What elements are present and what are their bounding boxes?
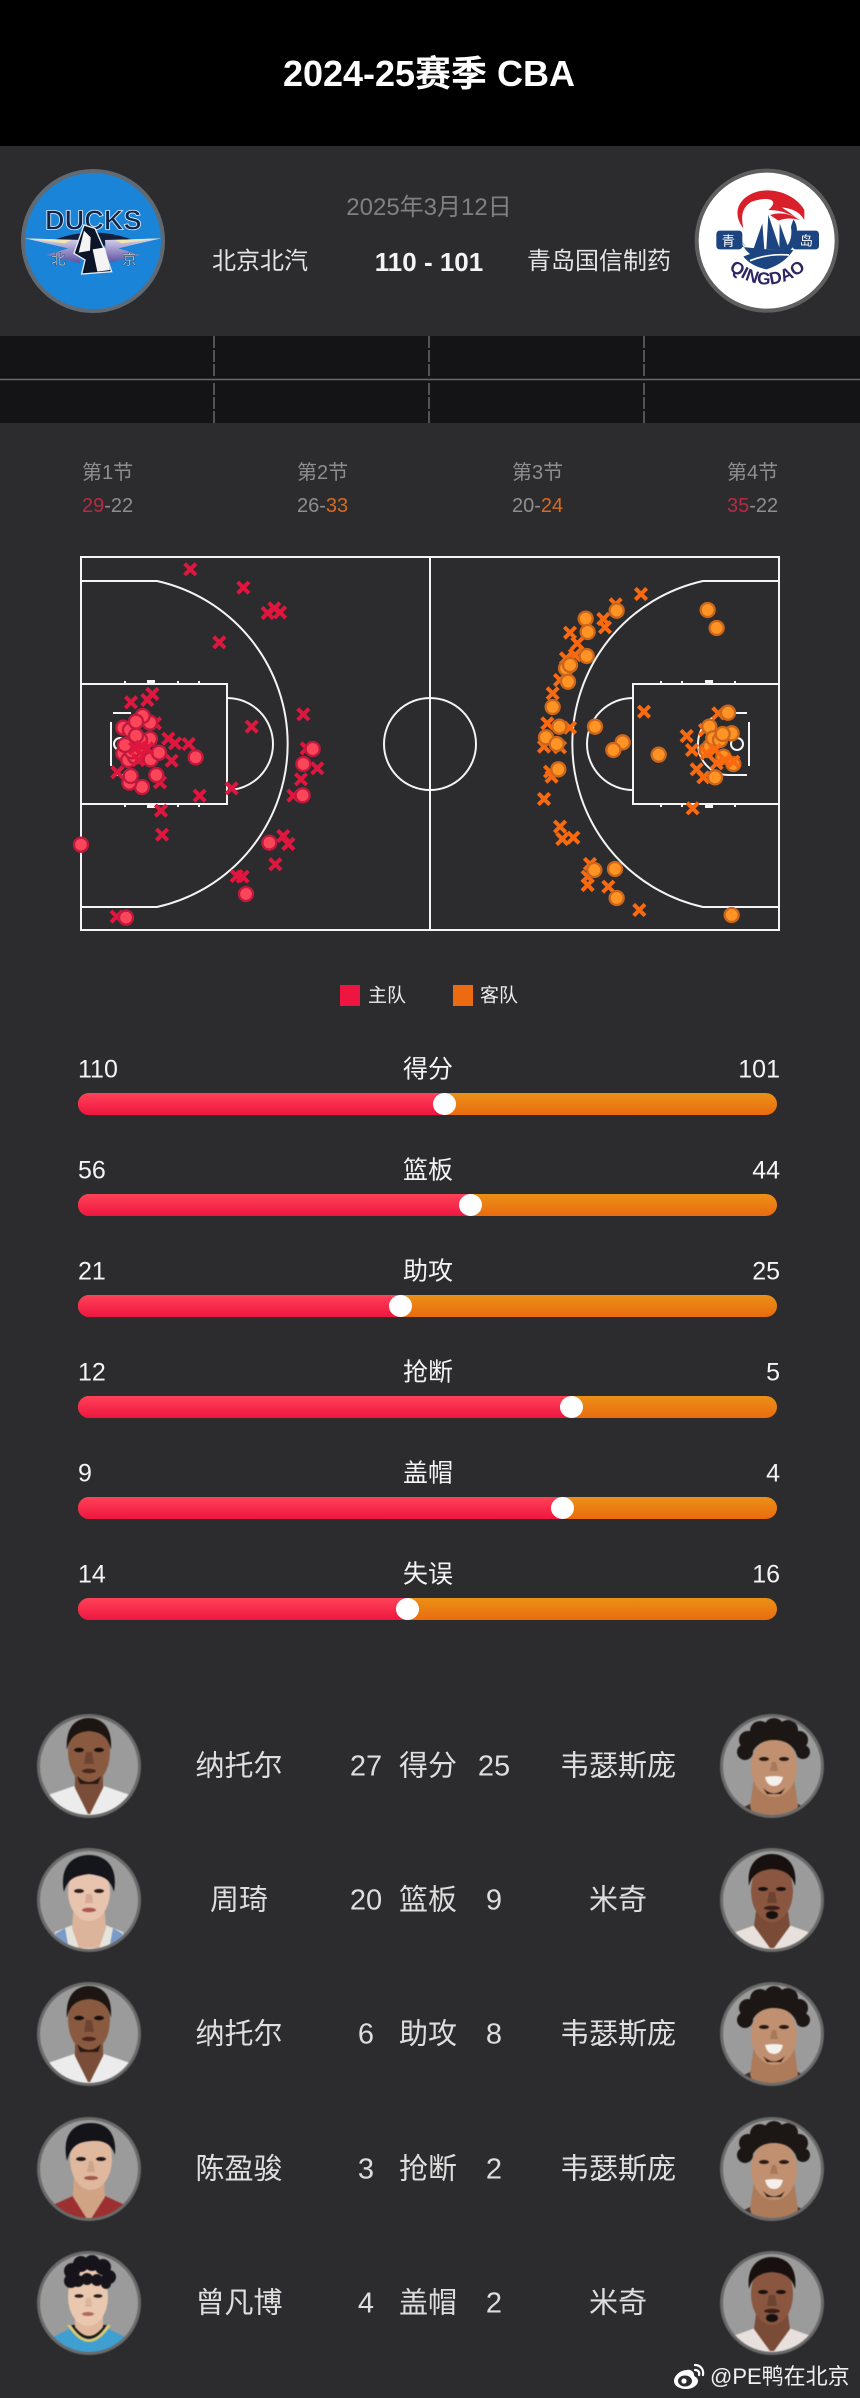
stat bar: points: 101: [738, 1055, 780, 1083]
icon: Beijing Ducks logo: DUCKS: [45, 204, 142, 235]
legend: away: 客队: [480, 986, 518, 1006]
icon: Qingdao logo: [694, 168, 839, 313]
icon: Qingdao logo: 岛: [800, 230, 813, 249]
avatar: Mickey: [720, 2250, 824, 2356]
player row: rebounds leaders: 篮板: [399, 1884, 457, 1916]
stat bar: steals: [78, 1358, 780, 1418]
stat bar: turnovers: 失误: [403, 1560, 453, 1588]
player row: points leaders: [36, 1714, 824, 1818]
shot chart: [72, 556, 780, 931]
player row: blocks leaders: 2: [486, 2288, 502, 2320]
player row: rebounds leaders: 米奇: [589, 1884, 647, 1916]
title: 2024-25赛季 CBA: [283, 52, 575, 94]
avatar: Zhou Qi: [36, 1848, 142, 1952]
stat bar: blocks: 盖帽: [403, 1459, 453, 1487]
player row: blocks leaders: [36, 2250, 824, 2356]
panel: match header: [0, 146, 860, 336]
quarter 4: 35-22: [727, 495, 778, 517]
avatar: Zeng Fanbo: [36, 2250, 142, 2356]
player row: points leaders: 韦瑟斯庞: [560, 1750, 676, 1782]
player row: blocks leaders: 曾凡博: [195, 2288, 283, 2320]
final score: 110 - 101: [375, 247, 483, 277]
avatar: Mickey: [720, 1848, 824, 1952]
stat bar: rebounds: 篮板: [403, 1156, 453, 1184]
stat bar: assists: 25: [752, 1257, 780, 1285]
player row: blocks leaders: 米奇: [589, 2288, 647, 2320]
quarter 2: 第2节: [297, 462, 348, 484]
stat bar: assists: 助攻: [403, 1257, 453, 1285]
player row: assists leaders: [36, 1982, 824, 2086]
stat bar: rebounds: 56: [78, 1156, 106, 1184]
stat bar: points: 得分: [403, 1055, 453, 1083]
player row: steals leaders: 韦瑟斯庞: [560, 2154, 676, 2186]
icon: Beijing Ducks logo: [21, 169, 165, 313]
stat bar: assists: 21: [78, 1257, 106, 1285]
legend: [340, 985, 518, 1006]
away team shots: [538, 588, 740, 922]
icon: Qingdao logo: QINGDAO: [731, 262, 804, 284]
stat bar: steals: 抢断: [403, 1358, 453, 1386]
stat bar: assists: [78, 1257, 780, 1317]
player row: points leaders: 27: [350, 1750, 382, 1782]
quarter 2: [297, 462, 348, 517]
player row: steals leaders: 3: [358, 2154, 374, 2186]
player row: assists leaders: 8: [486, 2018, 502, 2050]
timeline strip: [0, 336, 860, 423]
quarter 4: [727, 462, 778, 517]
stat bar: blocks: 9: [78, 1459, 92, 1487]
stat bar: steals: 5: [766, 1358, 780, 1386]
player row: blocks leaders: 4: [358, 2288, 374, 2320]
player row: rebounds leaders: 9: [486, 1884, 502, 1916]
court lines: [81, 557, 779, 930]
icon: Beijing Ducks logo: 北: [51, 248, 66, 269]
player row: points leaders: 25: [478, 1750, 510, 1782]
stat bar: points: 110: [78, 1055, 118, 1083]
stat bar: steals: 12: [78, 1358, 106, 1386]
quarter 3: 20-24: [512, 495, 563, 517]
player row: rebounds leaders: [36, 1848, 824, 1952]
stat bar: turnovers: 16: [752, 1560, 780, 1588]
stat bar: blocks: 4: [766, 1459, 780, 1487]
avatar: Chen Yingjun: [36, 2116, 142, 2222]
legend: away: [453, 985, 518, 1006]
stat bar: turnovers: [78, 1560, 780, 1620]
quarter 2: 26-33: [297, 495, 348, 517]
icon: Beijing Ducks logo: 京: [122, 248, 137, 269]
player row: steals leaders: 抢断: [399, 2154, 457, 2186]
player row: blocks leaders: 盖帽: [399, 2288, 457, 2320]
player row: steals leaders: 2: [486, 2154, 502, 2186]
stat bar: points: [78, 1055, 780, 1115]
icon: weibo: [674, 2364, 704, 2389]
player row: rebounds leaders: 20: [350, 1884, 382, 1916]
legend: home: [340, 985, 406, 1006]
quarter 3: [512, 462, 563, 517]
home team shots: [74, 564, 323, 925]
avatar: Nattle: [36, 1714, 142, 1818]
date: 2025年3月12日: [346, 194, 512, 221]
stat bar: blocks: [78, 1459, 780, 1519]
player row: points leaders: 得分: [399, 1750, 457, 1782]
avatar: Weatherspoon: [720, 1714, 824, 1818]
stat bar: rebounds: 44: [752, 1156, 780, 1184]
away team name: 青岛国信制药: [527, 248, 671, 275]
avatar: Weatherspoon: [720, 2116, 824, 2222]
stat bar: rebounds: [78, 1156, 780, 1216]
avatar: Nattle: [36, 1982, 142, 2086]
quarter 4: 第4节: [727, 462, 778, 484]
player row: steals leaders: 陈盈骏: [195, 2154, 283, 2186]
home team name: 北京北汽: [212, 248, 308, 275]
player row: assists leaders: 韦瑟斯庞: [560, 2018, 676, 2050]
quarter 1: 29-22: [82, 495, 133, 517]
quarter scores: [82, 462, 778, 517]
player row: assists leaders: 6: [358, 2018, 374, 2050]
player row: rebounds leaders: 周琦: [210, 1884, 268, 1916]
title bar: [0, 0, 860, 146]
avatar: Weatherspoon: [720, 1982, 824, 2086]
legend: home: 主队: [368, 986, 406, 1006]
player row: steals leaders: [36, 2116, 824, 2222]
stat bar: turnovers: 14: [78, 1560, 106, 1588]
player row: assists leaders: 纳托尔: [195, 2018, 283, 2050]
watermark text: @PE鸭在北京: [710, 2364, 850, 2389]
quarter 1: 第1节: [82, 462, 133, 484]
quarter 1: [82, 462, 133, 517]
quarter 3: 第3节: [512, 462, 563, 484]
player row: assists leaders: 助攻: [399, 2018, 457, 2050]
watermark: [674, 2364, 850, 2389]
player row: points leaders: 纳托尔: [195, 1750, 283, 1782]
icon: Qingdao logo: 青: [722, 230, 735, 249]
